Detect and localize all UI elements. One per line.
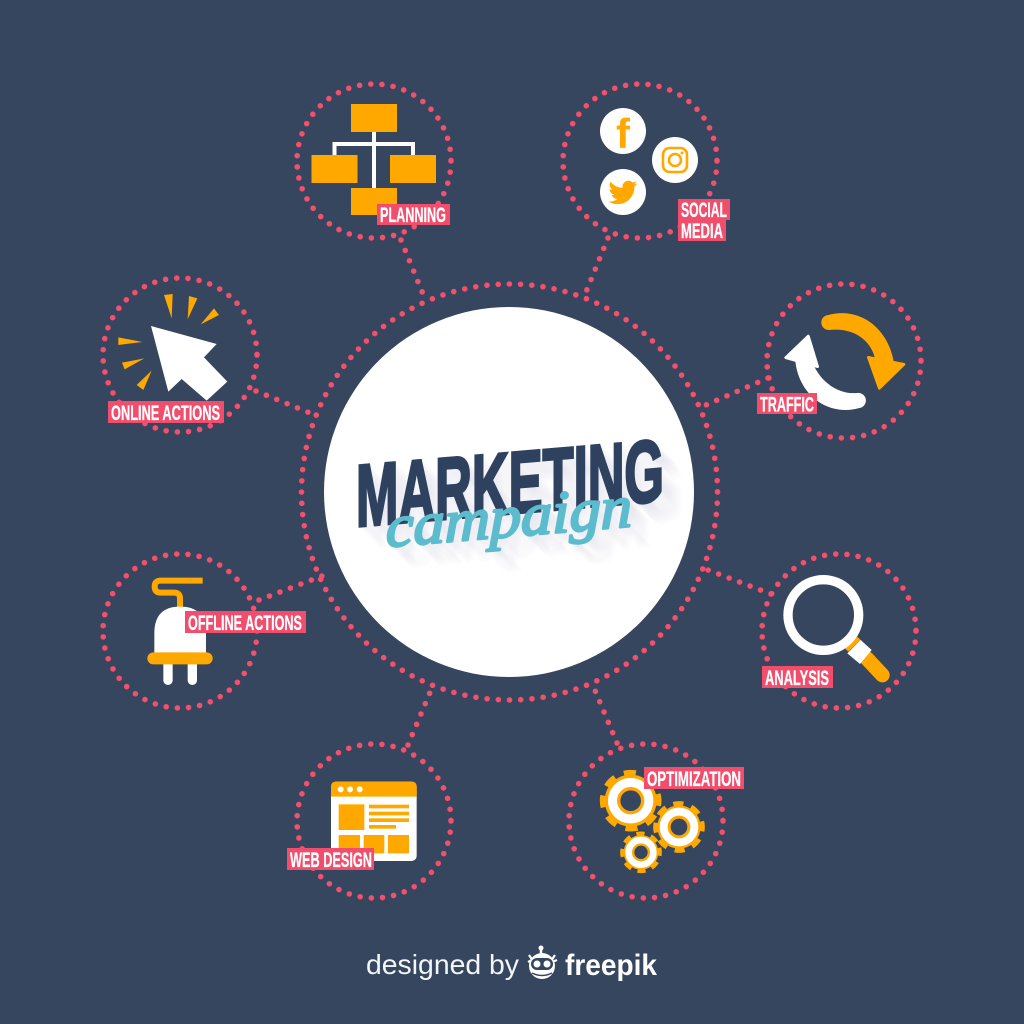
- online actions ring: [103, 278, 257, 432]
- icon: instagram: [652, 137, 698, 183]
- planning label: [377, 204, 450, 227]
- panel: offline actions: [103, 554, 306, 708]
- traffic label: [757, 393, 817, 416]
- planning label: PLANNING: [380, 204, 446, 227]
- social media ring: [563, 84, 717, 238]
- icon: magnifier: [788, 580, 882, 675]
- planning ring: [297, 84, 451, 238]
- connectors: [256, 238, 771, 745]
- panel: traffic: [757, 284, 921, 438]
- designed by text: designed by: [366, 949, 519, 980]
- online actions label: ONLINE ACTIONS: [111, 402, 220, 425]
- offline actions label: [185, 611, 306, 635]
- title script subheading: campaign: [386, 473, 632, 561]
- offline actions ring: [103, 554, 257, 708]
- web design label: [287, 848, 374, 872]
- social media label: SOCIAL: [681, 199, 727, 222]
- icon: facebook: [600, 108, 646, 157]
- icon: gears: [597, 767, 707, 875]
- icon: refresh arrows: [786, 313, 904, 410]
- optimization label: OPTIMIZATION: [647, 768, 741, 791]
- freepik wordmark: freepik: [565, 949, 657, 982]
- offline actions label: OFFLINE ACTIONS: [188, 612, 302, 635]
- central white circle: [324, 307, 694, 677]
- optimization label: [644, 767, 744, 791]
- icon: freepik mascot: [528, 946, 557, 979]
- icon: facebook: f: [616, 110, 631, 157]
- panel: optimization: [569, 744, 744, 898]
- social media label: MEDIA: [681, 220, 723, 243]
- optimization ring: [569, 744, 723, 898]
- panel: analysis: [762, 554, 916, 708]
- analysis label: [762, 666, 833, 690]
- footer credit: [366, 946, 657, 982]
- web design label: WEB DESIGN: [290, 849, 372, 872]
- title heading: MARKETING: [356, 421, 664, 545]
- central dotted ring: [302, 284, 718, 700]
- panel: social media: [563, 84, 730, 243]
- panel: planning: [297, 84, 451, 238]
- traffic label: TRAFFIC: [760, 394, 814, 416]
- analysis ring: [762, 554, 916, 708]
- social media label: [678, 199, 730, 243]
- analysis label: ANALYSIS: [765, 667, 829, 690]
- icon: cursor click: [118, 294, 227, 401]
- panel: web design: [287, 744, 451, 898]
- icon: browser window: [331, 782, 417, 861]
- panel: online actions: [103, 278, 257, 432]
- icon: org chart: [312, 104, 436, 215]
- icon: plug: [147, 581, 213, 685]
- traffic ring: [767, 284, 921, 438]
- icon: twitter: [600, 169, 646, 215]
- web design ring: [297, 744, 451, 898]
- online actions label: [108, 401, 224, 425]
- title: marketing campaign: [356, 421, 664, 561]
